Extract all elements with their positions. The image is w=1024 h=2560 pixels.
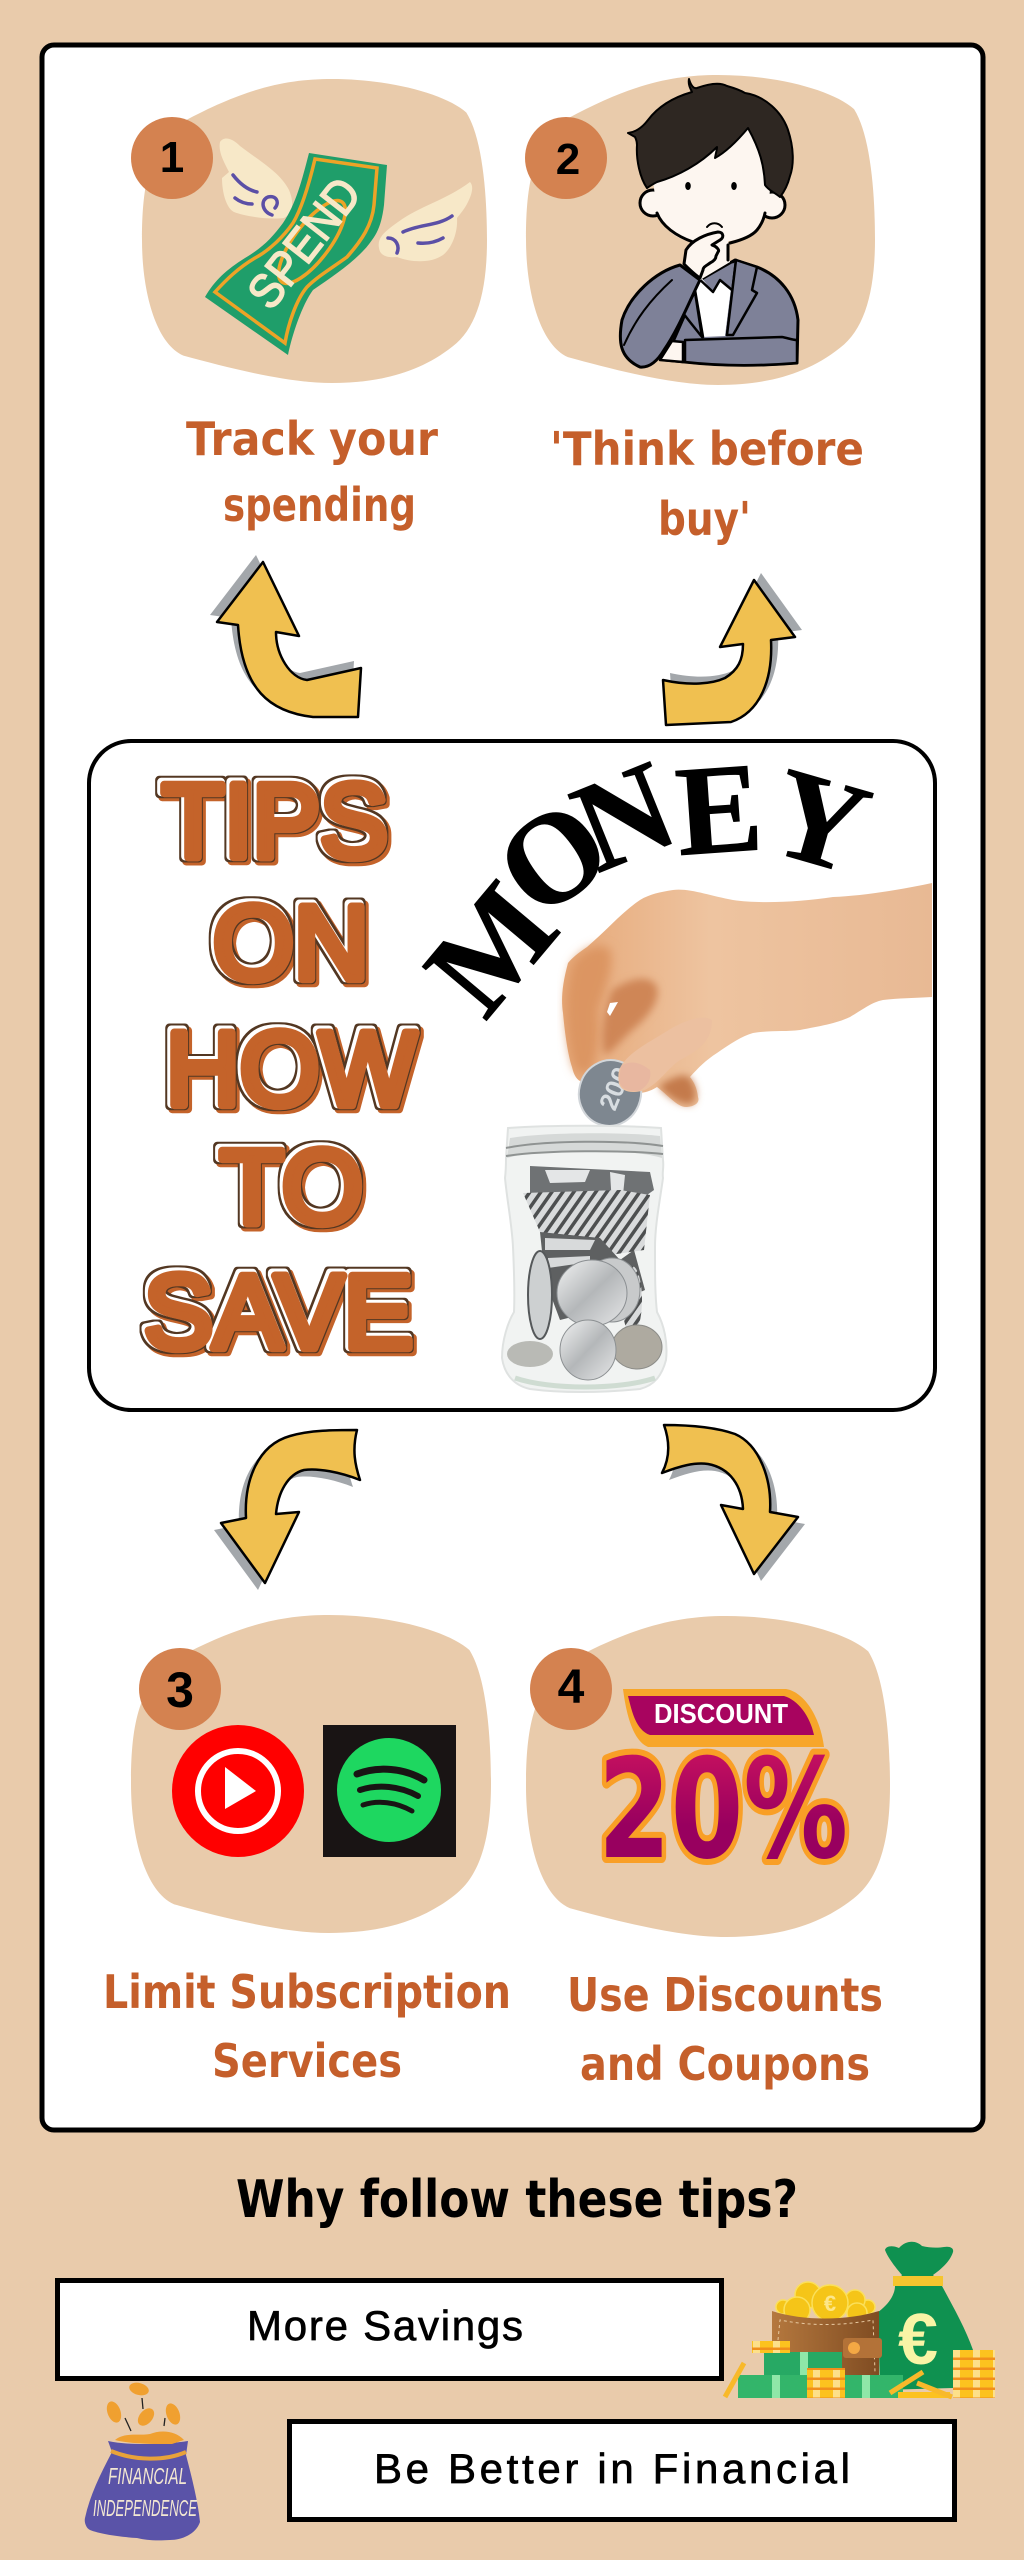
title: money arched: Y bbox=[756, 740, 884, 902]
label: track your spending: Track your bbox=[186, 412, 438, 466]
icon: money bag and wallet: € bbox=[824, 2291, 836, 2316]
icon: financial independence bag: FINANCIAL bbox=[108, 2463, 187, 2489]
number badge 4: 4 bbox=[558, 1661, 585, 1714]
label: limit subscription services: Services bbox=[212, 2034, 402, 2088]
title: money arched: O bbox=[471, 771, 635, 944]
image: jar of coins bbox=[502, 1126, 667, 1392]
tip 3 card bbox=[103, 1615, 511, 2088]
title: money arched: N bbox=[554, 733, 693, 899]
reason box: be better in financial bbox=[290, 2422, 954, 2520]
number badge 3: 3 bbox=[166, 1662, 194, 1718]
title: tips on how to save: TO bbox=[218, 1127, 361, 1244]
icon: financial independence bag: INDEPENDENCE bbox=[93, 2495, 197, 2521]
title: tips on how to save: HOW bbox=[164, 1009, 414, 1126]
label: think before buy: 'Think before bbox=[550, 422, 864, 476]
arrow: centre to tip 1 bbox=[210, 555, 361, 717]
icon: youtube music bbox=[172, 1725, 304, 1857]
reason box: be better in financial: Be Better in Financial bbox=[374, 2445, 850, 2492]
icon: money bag and wallet: € bbox=[898, 2300, 938, 2380]
blob 2 bbox=[526, 75, 875, 385]
blob 4 bbox=[526, 1616, 890, 1937]
image: hand dropping coin: 200 bbox=[593, 1063, 637, 1114]
icon: flying money bbox=[205, 139, 472, 355]
label: use discounts and coupons bbox=[567, 1968, 883, 2091]
tip 2 card bbox=[525, 75, 875, 546]
icon: discount 20 percent: 20% bbox=[598, 1729, 848, 1890]
heading: why follow these tips: Why follow these tips? bbox=[236, 2170, 798, 2230]
blob 3 bbox=[131, 1615, 491, 1933]
arrow: centre to tip 2 bbox=[663, 573, 802, 725]
title: money arched bbox=[398, 733, 884, 1040]
tip 4 card bbox=[526, 1616, 890, 2091]
icon: flying money: SPEND bbox=[238, 168, 372, 319]
title: tips on how to save bbox=[142, 761, 414, 1369]
label: use discounts and coupons: and Coupons bbox=[580, 2037, 870, 2091]
icon: money bag and wallet bbox=[725, 2242, 995, 2398]
title: tips on how to save: SAVE bbox=[142, 1252, 411, 1369]
image: hand dropping coin bbox=[562, 883, 932, 1133]
title: tips on how to save: ON bbox=[211, 883, 367, 1000]
icon: financial independence bag bbox=[85, 2381, 200, 2540]
main white panel bbox=[42, 45, 983, 2130]
label: limit subscription services: Limit Subscription bbox=[103, 1965, 511, 2019]
reason box: more savings: More Savings bbox=[247, 2302, 523, 2349]
icon: spotify bbox=[323, 1725, 456, 1857]
icon: thinking man bbox=[620, 79, 798, 367]
number badge 2: 2 bbox=[556, 135, 580, 184]
number badge 1 bbox=[131, 117, 213, 199]
tip 1 card bbox=[131, 79, 487, 532]
number badge 3 bbox=[139, 1648, 221, 1730]
blob 1 bbox=[142, 79, 487, 383]
centre panel bbox=[89, 733, 935, 1410]
icon: discount 20 percent bbox=[598, 1689, 848, 1890]
number badge 2 bbox=[525, 117, 607, 199]
label: track your spending: spending bbox=[223, 478, 416, 532]
label: think before buy: buy' bbox=[658, 492, 751, 546]
label: track your spending bbox=[186, 412, 438, 532]
arrow: centre to tip 3 bbox=[214, 1430, 360, 1590]
reason box: more savings bbox=[58, 2280, 722, 2378]
title: money arched: M bbox=[398, 856, 584, 1040]
title: tips on how to save: TIPS bbox=[160, 761, 386, 878]
label: limit subscription services bbox=[103, 1965, 511, 2088]
arrow: centre to tip 4 bbox=[662, 1425, 805, 1581]
number badge 1: 1 bbox=[160, 133, 184, 182]
label: think before buy bbox=[550, 422, 864, 546]
number badge 4 bbox=[530, 1648, 612, 1730]
label: use discounts and coupons: Use Discounts bbox=[567, 1968, 883, 2022]
title: money arched: E bbox=[671, 735, 767, 883]
icon: discount 20 percent: DISCOUNT bbox=[654, 1698, 788, 1729]
